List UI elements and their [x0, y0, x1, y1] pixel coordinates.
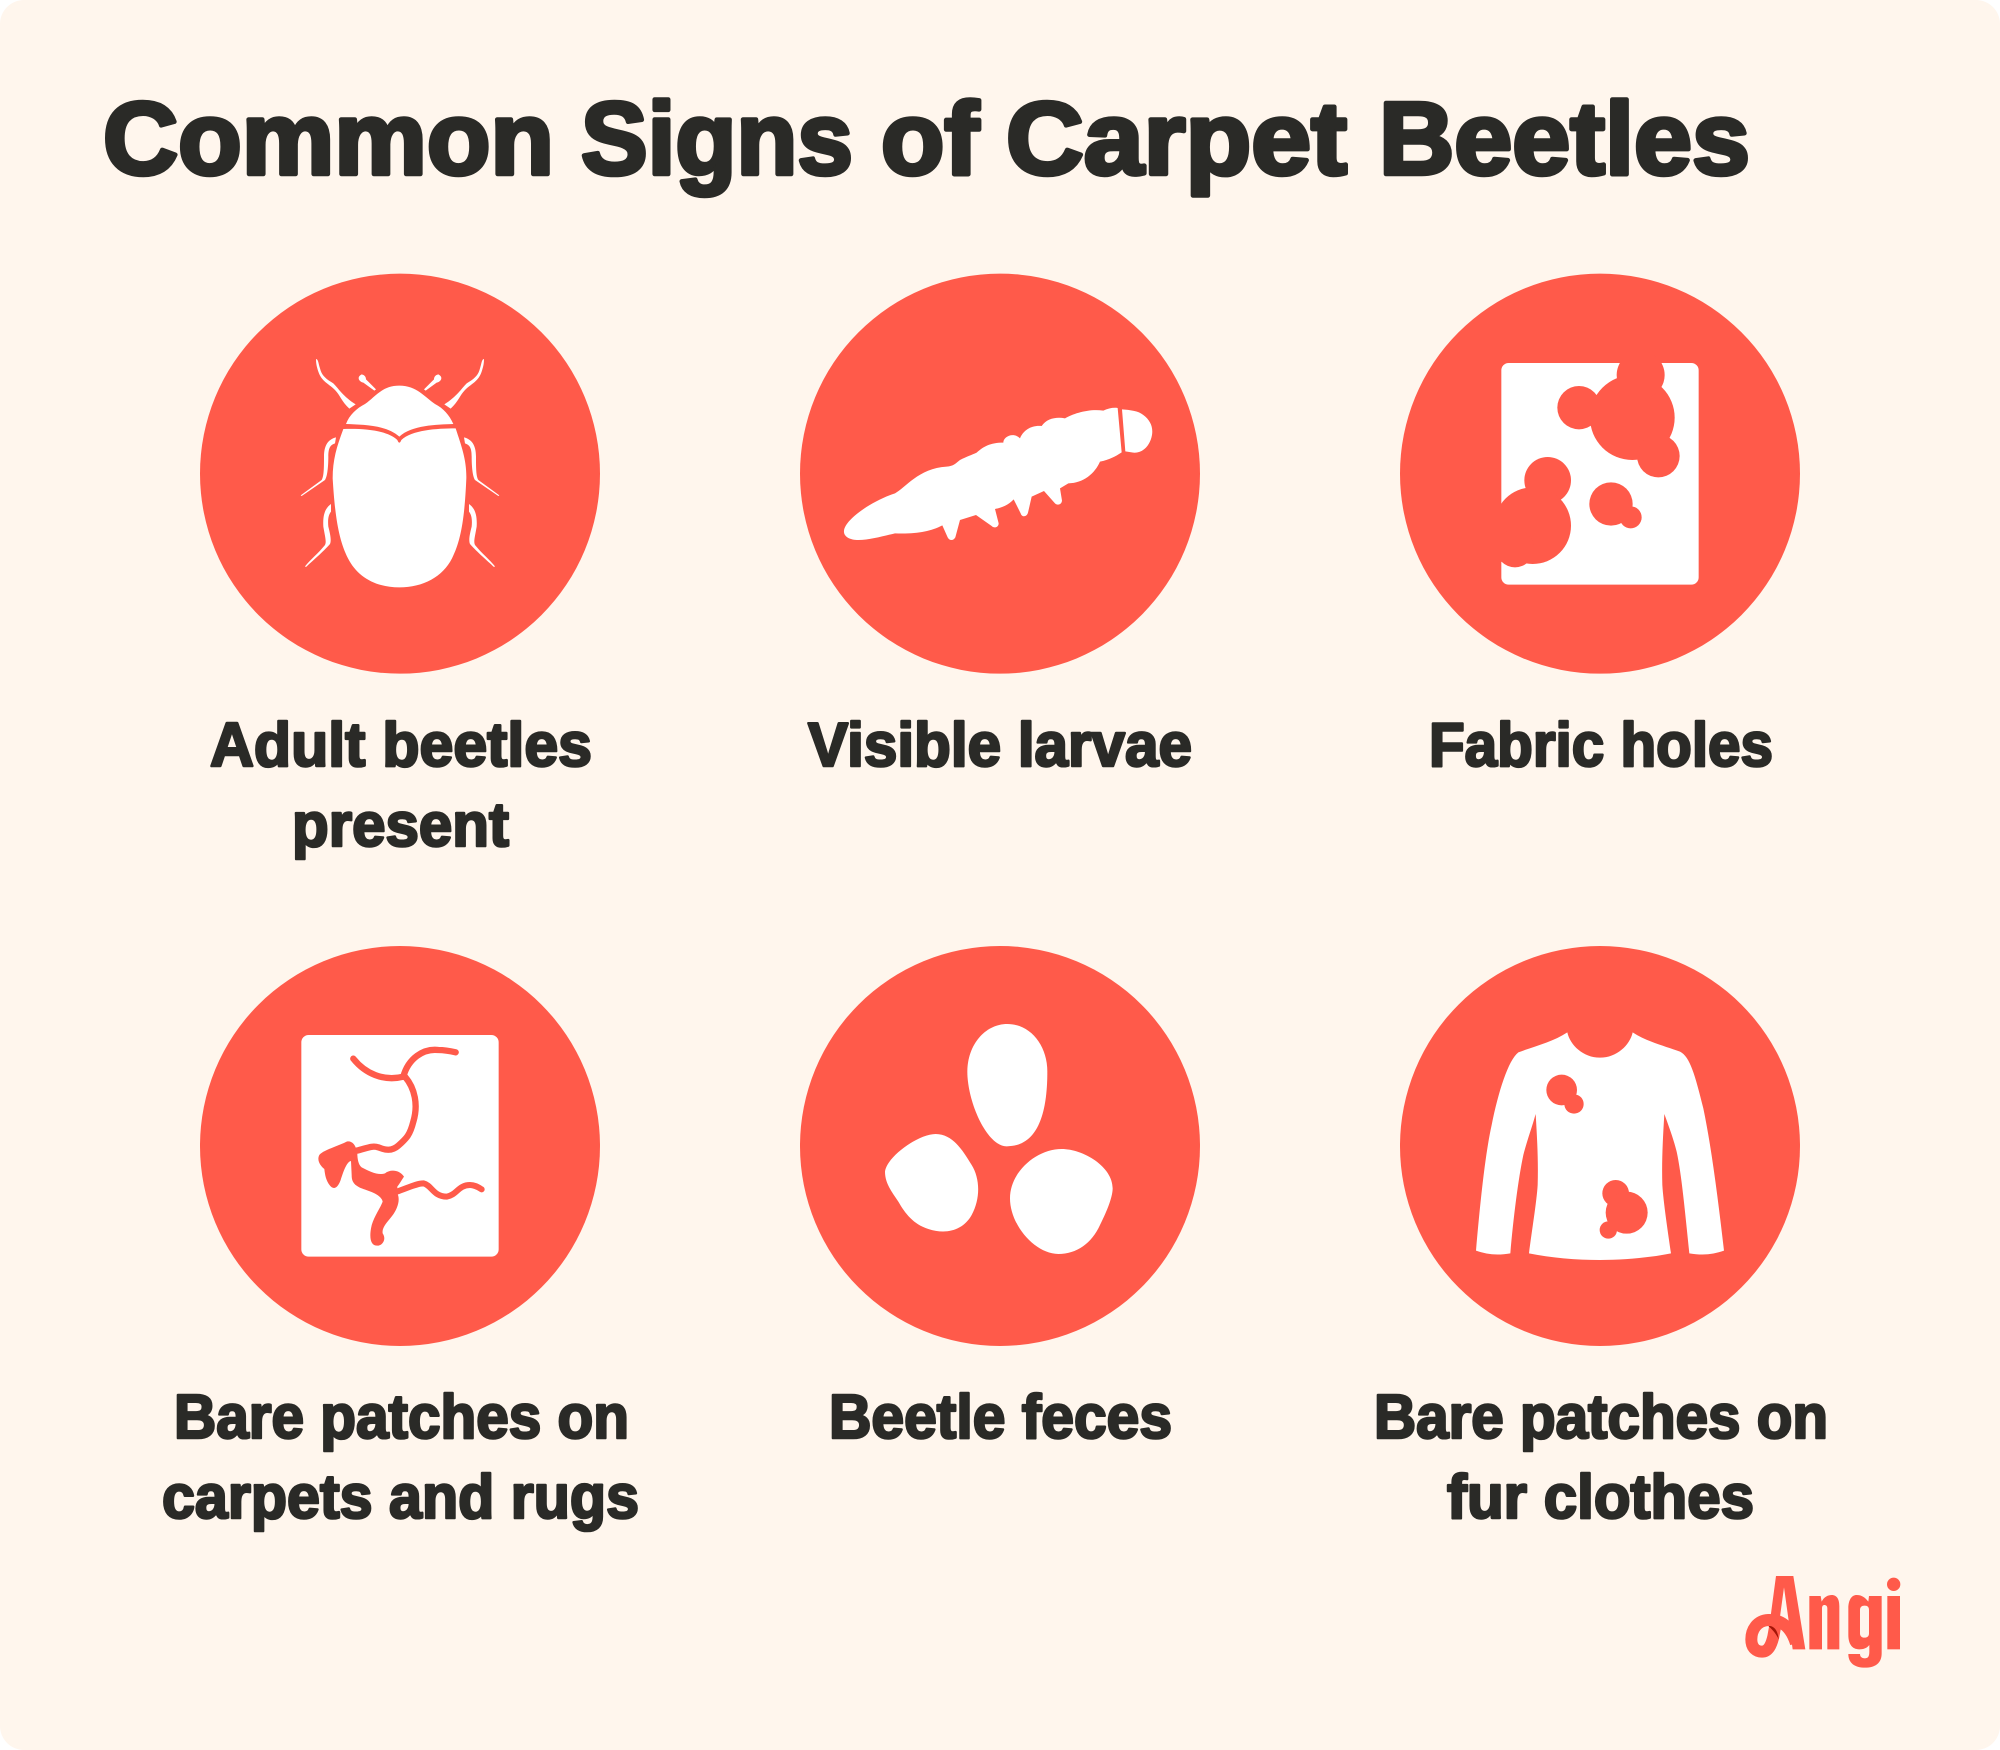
- title: Carpet: [1006, 81, 1347, 196]
- label: adult beetles present: Adult beetles: [210, 711, 592, 780]
- panel: visible larvae: [800, 274, 1200, 780]
- label: bare patches on fur clothes: Bare patches on: [1374, 1383, 1828, 1452]
- panel: fabric holes: [1400, 274, 1800, 780]
- icon: holed fabric in circle: [1400, 274, 1800, 674]
- title: of: [881, 81, 980, 196]
- label: adult beetles present: [210, 711, 592, 860]
- icon: damaged carpet in circle: [200, 946, 600, 1346]
- label: bare patches on carpets and rugs: carpets and rugs: [162, 1463, 639, 1532]
- label: bare patches on carpets and rugs: [162, 1383, 639, 1532]
- panel: bare patches on carpets and rugs: [162, 946, 639, 1532]
- label: bare patches on fur clothes: [1374, 1383, 1828, 1532]
- panel: beetle feces: [800, 946, 1200, 1452]
- label: adult beetles present: present: [292, 791, 509, 860]
- icon: larva in circle: [800, 274, 1200, 674]
- label: beetle feces: Beetle feces: [829, 1383, 1172, 1452]
- panel: bare patches on fur clothes: [1374, 946, 1828, 1532]
- icon: damaged sweater in circle: [1400, 946, 1800, 1346]
- label: fabric holes: Fabric holes: [1429, 711, 1773, 780]
- label: visible larvae: Visible larvae: [808, 711, 1192, 780]
- title: Beetles: [1379, 81, 1750, 196]
- icon: beetle in circle: [200, 274, 600, 674]
- logo: Angi: [1751, 1576, 1900, 1668]
- label: bare patches on carpets and rugs: Bare patches on: [174, 1383, 629, 1452]
- title: Signs: [581, 81, 853, 196]
- panel: adult beetles: [200, 274, 600, 860]
- label: bare patches on fur clothes: fur clothes: [1447, 1463, 1754, 1532]
- icon: droppings in circle: [800, 946, 1200, 1346]
- title: Common: [103, 81, 554, 196]
